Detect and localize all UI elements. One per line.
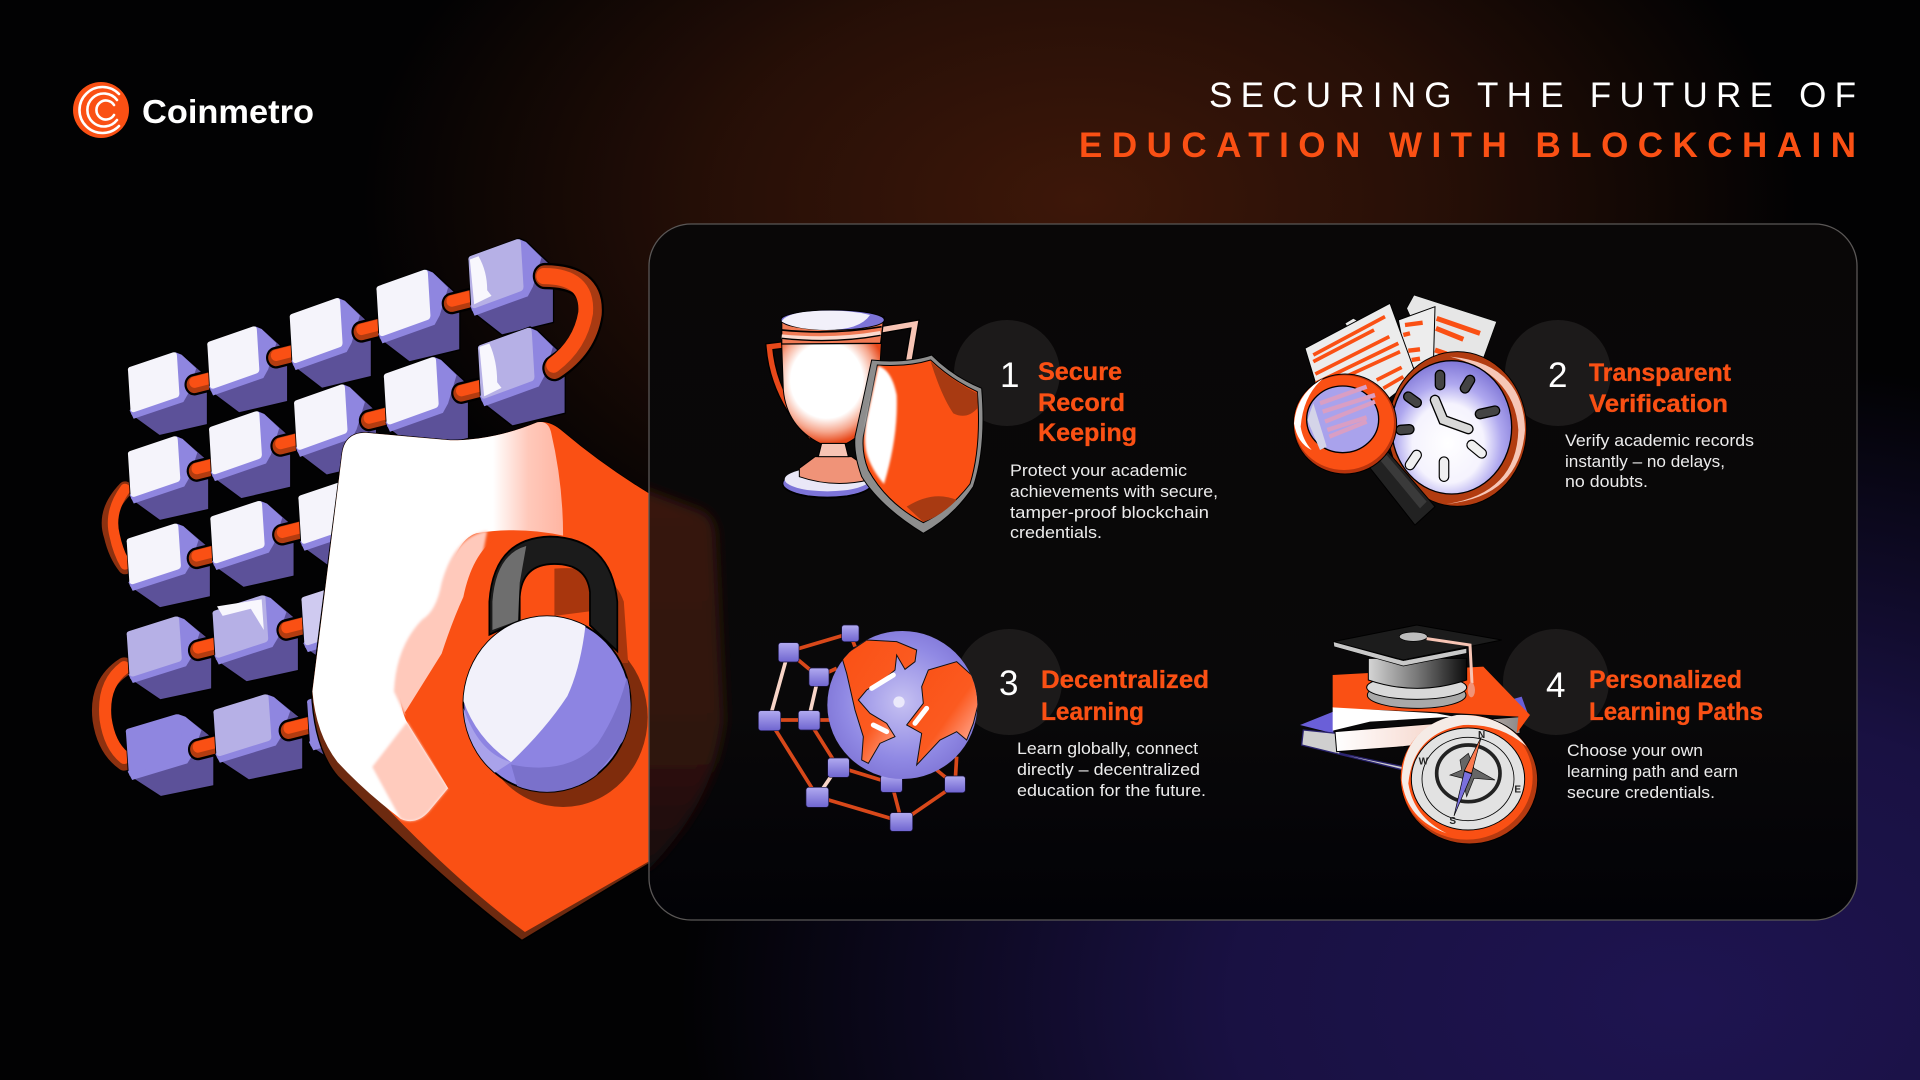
heading 1: Secure (1038, 358, 1122, 386)
heading 3: Decentralized (1041, 666, 1209, 694)
hero illustration: blockchain cubes and shield with padlock (101, 238, 592, 797)
number circle 3 (956, 629, 1062, 735)
cube row 1 (128, 238, 554, 436)
description 2 (1565, 431, 1754, 491)
description 4: Choose your own (1567, 741, 1703, 760)
heading 3 (1041, 666, 1209, 726)
compass letters: E (1514, 785, 1521, 796)
graduation cap (1367, 682, 1466, 708)
heading 3: Learning (1041, 698, 1144, 726)
description 3: directly – decentralized (1017, 760, 1200, 779)
continents (842, 640, 980, 765)
shield seen through the panel (650, 485, 729, 870)
description 1: achievements with secure, (1010, 482, 1218, 501)
logo icon (73, 82, 129, 138)
heading 1: Record (1038, 389, 1125, 417)
description 1 (1010, 461, 1218, 542)
logo (73, 82, 314, 138)
cube row 3 (127, 479, 383, 608)
compass letters (1419, 730, 1521, 827)
top right arc connector (544, 276, 592, 368)
description 3: Learn globally, connect (1017, 739, 1198, 758)
description 4: learning path and earn (1567, 762, 1738, 781)
description 1: credentials. (1010, 523, 1102, 542)
padlock (459, 537, 648, 807)
description 1: Protect your academic (1010, 461, 1188, 480)
logo wordmark: Coinmetro (142, 93, 314, 130)
number circle 2 (1505, 320, 1611, 426)
number circle 4 (1503, 629, 1609, 735)
compass letters: N (1478, 730, 1485, 741)
description 4 (1567, 741, 1738, 802)
title line 1: SECURING THE FUTURE OF (1209, 76, 1856, 115)
heading 1: Keeping (1038, 419, 1137, 447)
hero shield (311, 422, 648, 940)
magnifier (1365, 448, 1435, 525)
description 2: instantly – no delays, (1565, 452, 1725, 471)
description 2: Verify academic records (1565, 431, 1754, 450)
heading 2 (1589, 359, 1732, 418)
number 3: 3 (999, 664, 1018, 703)
description 1: tamper-proof blockchain (1010, 503, 1209, 522)
description 3 (1017, 739, 1206, 800)
heading 4: Learning Paths (1589, 698, 1763, 726)
network nodes (758, 625, 965, 831)
books (1300, 712, 1333, 733)
shield highlight (312, 422, 563, 821)
heading 2: Verification (1589, 390, 1728, 418)
heading 4: Personalized (1589, 666, 1742, 694)
heading 4 (1589, 666, 1763, 726)
item 1: secure record keeping (769, 310, 1218, 542)
compass letters: S (1449, 816, 1456, 827)
left arc connectors (101, 489, 125, 761)
title (1079, 76, 1856, 165)
compass (1401, 716, 1538, 844)
clock (1388, 352, 1527, 506)
compass letters: W (1419, 757, 1429, 768)
number circle 1 (954, 320, 1060, 426)
network edges (769, 633, 957, 822)
number 1: 1 (1000, 356, 1019, 395)
panel background (649, 224, 1857, 920)
description 2: no doubts. (1565, 472, 1648, 491)
description 3: education for the future. (1017, 781, 1206, 800)
title line 2: EDUCATION WITH BLOCKCHAIN (1079, 126, 1856, 165)
heading 2: Transparent (1589, 359, 1732, 387)
panel border (649, 224, 1857, 920)
icon: graduation cap, books and compass (1300, 625, 1538, 844)
description 4: secure credentials. (1567, 783, 1715, 802)
item 3: decentralized learning (758, 625, 1209, 831)
cube row 4 (127, 580, 390, 700)
icon: documents, clock and magnifier (1293, 295, 1527, 525)
globe (827, 631, 977, 779)
icon: globe and node network (758, 625, 980, 831)
cube row 5 (126, 684, 394, 797)
heading 1 (1038, 358, 1137, 447)
number 2: 2 (1548, 356, 1567, 395)
cube row 2 (128, 327, 565, 521)
icon: trophy and shield (769, 310, 983, 533)
item 4: personalized learning paths (1300, 625, 1763, 844)
number 4: 4 (1546, 666, 1565, 705)
item 2: transparent verification (1293, 295, 1754, 525)
